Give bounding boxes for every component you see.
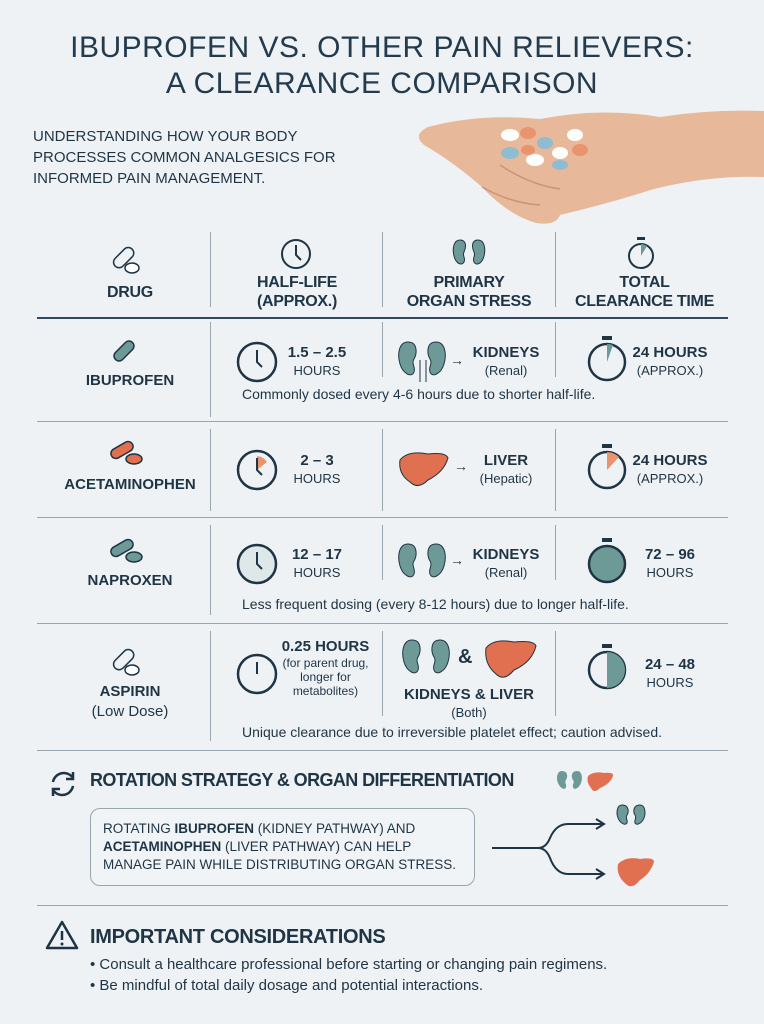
row: naproxen: Less frequent dosing (every 8-12 hours) due to longer half-life. xyxy=(242,596,629,612)
heading: total clearance: CLEARANCE TIME xyxy=(575,293,714,310)
row: ibuprofen: (Renal) xyxy=(485,363,527,378)
row: ibuprofen: 1.5 – 2.5 xyxy=(288,344,346,361)
icon: stopwatch xyxy=(628,237,654,269)
row: acetaminophen: LIVER xyxy=(484,452,528,469)
row: ibuprofen: 24 HOURS xyxy=(632,344,708,361)
row: acetaminophen: ACETAMINOPHEN xyxy=(64,476,196,493)
row: aspirin: HOURS xyxy=(647,675,693,690)
icon: warning xyxy=(46,920,78,950)
icon: kidneys xyxy=(452,240,486,264)
hand with pills xyxy=(418,110,764,224)
heading: organ stress: PRIMARY xyxy=(433,274,505,291)
heading: half-life: (APPROX.) xyxy=(257,293,337,310)
row: aspirin: (Low Dose) xyxy=(92,703,168,720)
heading: organ stress: ORGAN STRESS xyxy=(407,293,531,310)
section: rotation strategy xyxy=(52,770,654,886)
heading: total clearance xyxy=(575,274,714,310)
title: A CLEARANCE COMPARISON xyxy=(166,67,598,100)
row: aspirin: (Both) xyxy=(451,705,487,720)
bullets xyxy=(90,956,607,994)
row: acetaminophen: → xyxy=(454,458,468,474)
row: acetaminophen: 24 HOURS xyxy=(632,452,708,469)
heading: organ stress xyxy=(407,274,531,310)
row: aspirin: 0.25 HOURS xyxy=(282,638,369,655)
section: important considerations xyxy=(46,920,607,994)
row: naproxen: KIDNEYS xyxy=(473,546,539,563)
row: naproxen xyxy=(87,525,695,615)
title: IBUPROFEN VS. OTHER PAIN RELIEVERS: xyxy=(70,31,694,64)
row: acetaminophen: HOURS xyxy=(294,471,340,486)
row: aspirin: & xyxy=(458,646,472,668)
row: ibuprofen xyxy=(86,322,708,417)
row: acetaminophen xyxy=(64,429,708,511)
icon: rotation arrows xyxy=(52,772,74,796)
row: ibuprofen: → xyxy=(450,352,464,368)
row: acetaminophen: (Hepatic) xyxy=(480,471,532,486)
row: naproxen: (Renal) xyxy=(485,565,527,580)
row: naproxen: 12 – 17 xyxy=(292,546,342,563)
row: aspirin: KIDNEYS & LIVER xyxy=(404,686,534,703)
row: aspirin xyxy=(92,631,695,741)
icon: pills xyxy=(112,246,140,274)
row: acetaminophen: 2 – 3 xyxy=(300,452,334,469)
section: rotation strategy: ROTATING IBUPROFEN (KIDNEY PATHWAY) AND ACETAMINOPHEN (LIVER PATHWAY) CAN HELP MANAGE PAIN WHILE DISTRIBUTING ORGAN STRESS. xyxy=(103,821,456,872)
subtitle: UNDERSTANDING HOW YOUR BODY PROCESSES COMMON ANALGESICS FOR INFORMED PAIN MANAGEMENT. xyxy=(33,128,336,187)
callout box xyxy=(90,808,475,886)
row: ibuprofen: HOURS xyxy=(294,363,340,378)
row: aspirin: 24 – 48 xyxy=(645,656,695,673)
bullets: • Be mindful of total daily dosage and potential interactions. xyxy=(90,977,483,994)
heading: ROTATION STRATEGY & ORGAN DIFFERENTIATION xyxy=(90,770,514,790)
row: naproxen: 72 – 96 xyxy=(645,546,695,563)
table header xyxy=(107,232,714,310)
row: aspirin: (for parent drug, longer for metabolites) xyxy=(282,656,369,698)
heading: drug: DRUG xyxy=(107,284,153,301)
heading: half-life xyxy=(257,274,337,310)
row: ibuprofen: KIDNEYS xyxy=(473,344,539,361)
row: aspirin: ASPIRIN xyxy=(100,683,160,700)
row: aspirin: Unique clearance due to irreversible platelet effect; caution advised. xyxy=(242,724,662,740)
row: ibuprofen: IBUPROFEN xyxy=(86,372,174,389)
icon: clock xyxy=(281,239,311,269)
row: naproxen: HOURS xyxy=(294,565,340,580)
arrows split xyxy=(492,804,654,886)
row: naproxen: HOURS xyxy=(647,565,693,580)
heading: total clearance: TOTAL xyxy=(619,274,670,291)
row: ibuprofen: Commonly dosed every 4-6 hours due to shorter half-life. xyxy=(242,386,595,402)
heading: IMPORTANT CONSIDERATIONS xyxy=(90,926,385,948)
row: ibuprofen: (APPROX.) xyxy=(637,363,703,378)
title xyxy=(70,31,694,100)
heading: half-life: HALF-LIFE xyxy=(257,274,337,291)
bullets: • Consult a healthcare professional before starting or changing pain regimens. xyxy=(90,956,607,973)
row: naproxen: NAPROXEN xyxy=(87,572,172,589)
row: naproxen: → xyxy=(450,552,464,568)
row: acetaminophen: (APPROX.) xyxy=(637,471,703,486)
